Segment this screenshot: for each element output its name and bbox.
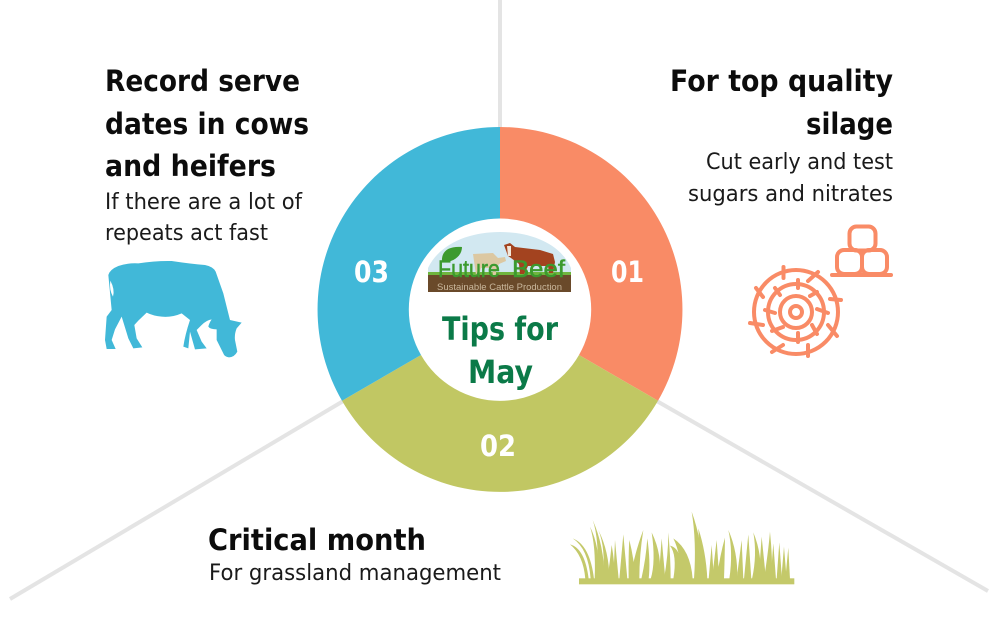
- text block: top quality silage: Cut early and test: [706, 150, 893, 175]
- text block: top quality silage: For top quality: [670, 64, 893, 98]
- text block: critical month: Critical month: [208, 523, 426, 557]
- center title: [442, 310, 558, 391]
- icon: bales and round bale: [750, 226, 891, 356]
- text block: record serve dates: If there are a lot of: [105, 190, 303, 215]
- calf: [473, 253, 506, 275]
- icon: cow: [105, 261, 242, 357]
- logo: Future Beef: Future: [438, 256, 500, 283]
- center title: Tips for: [442, 310, 558, 348]
- text block: top quality silage: [670, 64, 893, 207]
- logo: Future Beef: [428, 232, 571, 293]
- text block: top quality silage: silage: [806, 107, 893, 141]
- text block: record serve dates: and heifers: [105, 149, 276, 183]
- logo: Future Beef: Beef: [512, 256, 565, 283]
- cow: [504, 243, 555, 274]
- text block: record serve dates: repeats act fast: [105, 221, 268, 246]
- text block: record serve dates: [105, 64, 309, 246]
- logo: Future Beef: Sustainable Cattle Production: [437, 282, 562, 293]
- segment 01: [500, 127, 682, 401]
- number 03: 03: [354, 255, 389, 289]
- text block: top quality silage: sugars and nitrates: [688, 182, 893, 207]
- center title: May: [468, 353, 533, 391]
- text block: record serve dates: Record serve: [105, 64, 300, 98]
- icon: stacked bales: [832, 226, 891, 275]
- segment 02: [342, 355, 658, 492]
- donut chart: [318, 127, 682, 492]
- segment 03: [318, 127, 500, 401]
- number 02: 02: [480, 429, 516, 463]
- leaf: [442, 247, 462, 262]
- text block: critical month: [208, 523, 501, 586]
- text block: record serve dates: dates in cows: [105, 107, 309, 141]
- icon: round bale: [750, 267, 841, 356]
- text block: critical month: For grassland management: [209, 561, 501, 586]
- icon: grass: [570, 512, 794, 584]
- number 01: 01: [611, 255, 644, 289]
